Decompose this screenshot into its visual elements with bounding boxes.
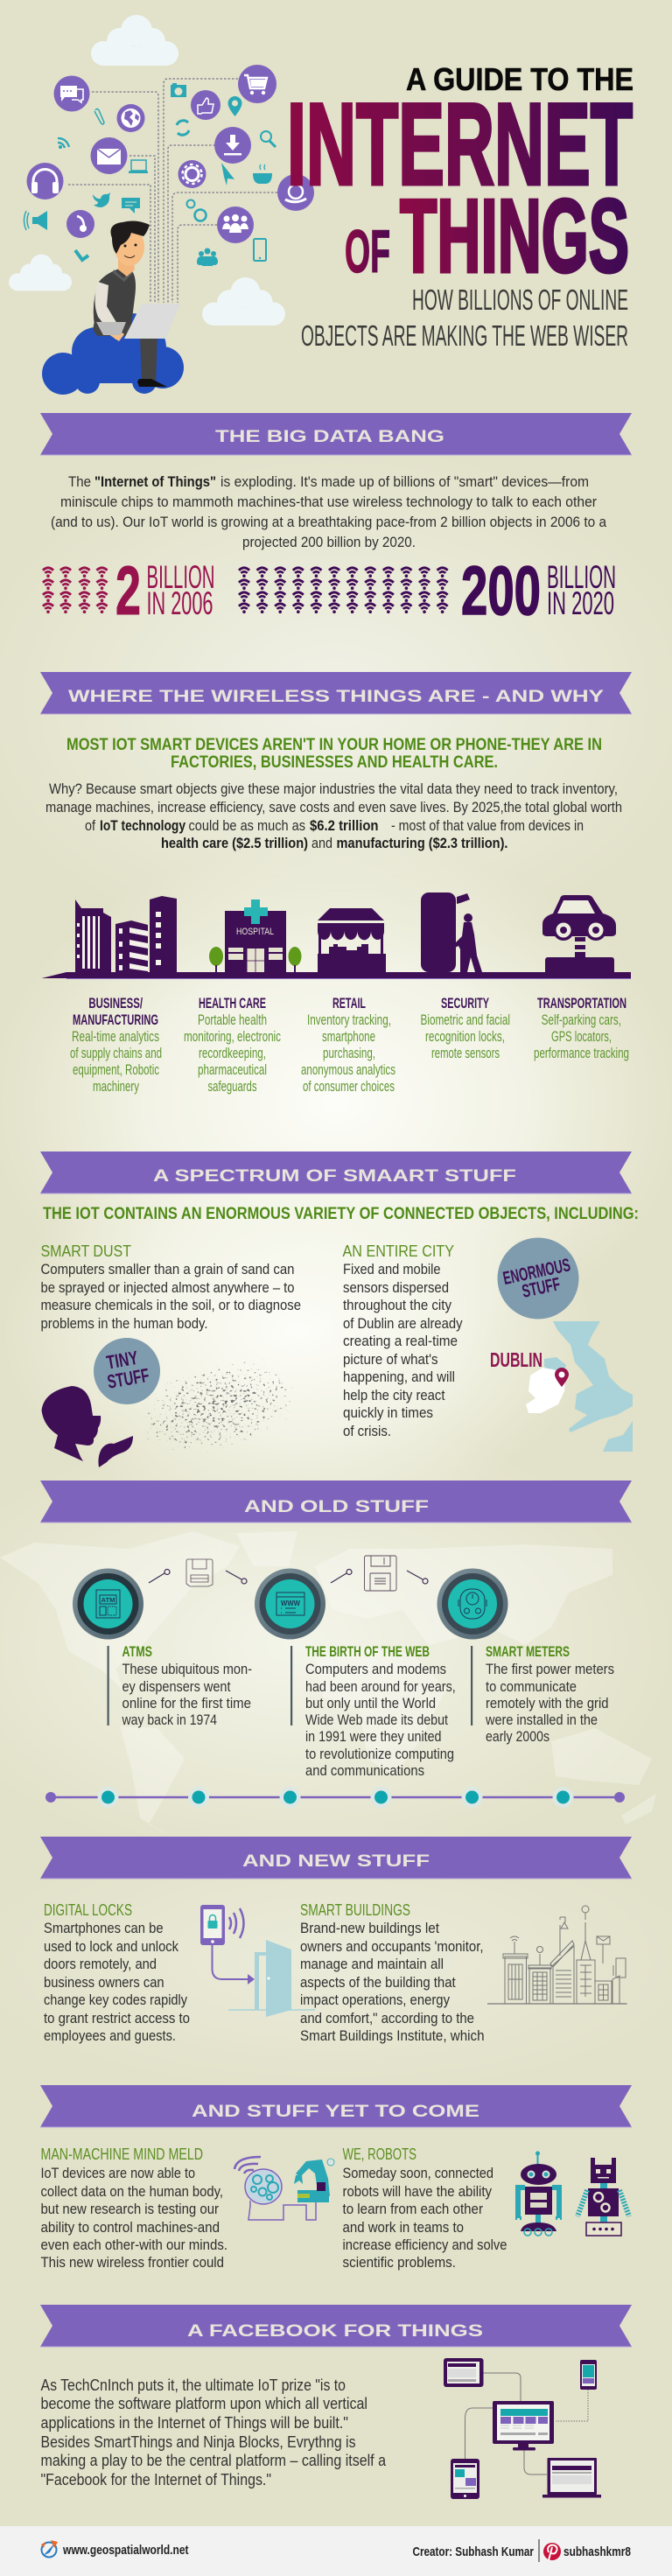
icon: music note bbox=[66, 210, 94, 238]
icon: floppy small bbox=[186, 1559, 213, 1586]
caption: transportation bbox=[534, 995, 629, 1061]
label: billion in 2006: BILLION bbox=[147, 559, 215, 595]
icon: phone bbox=[254, 239, 266, 261]
icon cluster: teal glyphs bbox=[24, 83, 276, 266]
text block: smart buildings: and comfort," according to the bbox=[300, 2010, 474, 2026]
device: laptop bbox=[542, 2458, 601, 2497]
label: billion in 2006 bbox=[147, 559, 215, 621]
caption: transportation: performance tracking bbox=[534, 1046, 629, 1061]
text block: why bbox=[46, 780, 622, 851]
green heading: most iot devices: FACTORIES, BUSINESSES AND HEALTH CARE. bbox=[171, 752, 498, 772]
text block: smart buildings: manage and maintain all bbox=[300, 1956, 444, 1972]
text block: smart buildings: aspects of the building that bbox=[300, 1974, 456, 1991]
website: www.geospatialworld.net bbox=[62, 2543, 189, 2558]
icon: wifi small bbox=[58, 138, 69, 149]
badge: enormous stuff bbox=[497, 1237, 579, 1320]
text block: we robots: increase efficiency and solve bbox=[343, 2236, 508, 2253]
icon: arrow corner bbox=[75, 250, 88, 260]
text block: why: - most of that value from devices in bbox=[391, 817, 584, 834]
text block: intro: (and to us). Our IoT world is growing at a breathtaking pace-from 2 billion objects in 2006 to a bbox=[51, 514, 606, 530]
text block: intro: "Internet of Things" bbox=[94, 473, 216, 490]
banner: where the wireless things are bbox=[40, 672, 632, 714]
text block: smart dust: Computers smaller than a grain of sand can bbox=[40, 1261, 294, 1278]
banner: and stuff yet to come: AND STUFF YET TO COME bbox=[192, 2102, 480, 2121]
text block: we robots bbox=[343, 2146, 508, 2271]
timeline bbox=[46, 1787, 625, 1808]
badge: enormous stuff: ENORMOUS bbox=[501, 1255, 572, 1289]
text block: birth of the web: and communications bbox=[305, 1762, 424, 1779]
buildings: business bbox=[75, 896, 177, 972]
connecting lines bbox=[466, 2373, 588, 2474]
caption: retail: of consumer choices bbox=[303, 1079, 395, 1095]
icon cluster: purple circles bbox=[26, 65, 314, 243]
label: billion in 2020 bbox=[547, 559, 616, 621]
building: retail bbox=[318, 908, 386, 972]
illustration: clouds behind header bbox=[9, 15, 285, 326]
caption: business: equipment, Robotic bbox=[73, 1062, 159, 1078]
text block: smart buildings: Brand-new buildings let bbox=[300, 1920, 439, 1936]
icon: paper plane bbox=[221, 163, 234, 186]
text block: facebook for things: become the software platform upon which all vertical bbox=[40, 2395, 368, 2412]
ground strip bbox=[42, 972, 631, 978]
text block: why: health care ($2.5 trillion) bbox=[161, 835, 308, 851]
background: world map bbox=[0, 1531, 656, 1836]
icon: gear bbox=[178, 160, 206, 188]
badge: enormous stuff: STUFF bbox=[520, 1274, 562, 1302]
device: monitor bbox=[493, 2401, 554, 2450]
man body bbox=[94, 221, 167, 387]
badge: tiny stuff: STUFF bbox=[106, 1364, 150, 1393]
text block: entire city: quickly in times bbox=[343, 1404, 433, 1421]
stat: 200 billion in 2020 bbox=[239, 551, 616, 629]
stat: 2 billion in 2006 bbox=[43, 551, 215, 629]
caption: security: Biometric and facial bbox=[420, 1012, 510, 1028]
text block: entire city: creating a real-time bbox=[343, 1333, 458, 1349]
caption: transportation: Self-parking cars, bbox=[542, 1012, 621, 1028]
text block: entire city: of Dublin are already bbox=[343, 1315, 463, 1332]
icon: gears bbox=[187, 200, 206, 220]
number: 200: 200 bbox=[461, 551, 541, 629]
text block: atms: online for the first time bbox=[122, 1695, 251, 1712]
text block: mind meld: This new wireless frontier could bbox=[40, 2254, 224, 2271]
icon: robot two bbox=[578, 2158, 629, 2236]
text block: digital locks: Smartphones can be bbox=[44, 1920, 164, 1936]
text block: digital locks: change key codes rapidly bbox=[44, 1992, 187, 2008]
logo: geospatial world bbox=[41, 2540, 58, 2557]
text block: digital locks: business owners can bbox=[44, 1974, 164, 1991]
icon: paperclip bbox=[94, 108, 104, 124]
text block: smart meters: to communicate bbox=[486, 1678, 577, 1695]
banner: and new stuff: AND NEW STUFF bbox=[242, 1852, 430, 1871]
text block: smart buildings: impact operations, energy bbox=[300, 1992, 450, 2008]
green heading: most iot devices bbox=[66, 735, 602, 772]
text block: facebook for things: "Facebook for the Internet of Things." bbox=[40, 2471, 271, 2488]
text block: why: and bbox=[312, 835, 332, 851]
caption: health care: Portable health bbox=[198, 1012, 267, 1028]
icon: sync arrows bbox=[177, 121, 189, 135]
banner: and stuff yet to come bbox=[40, 2085, 632, 2127]
caption: security: recognition locks, bbox=[425, 1029, 505, 1045]
caption: retail: Inventory tracking, bbox=[307, 1012, 391, 1028]
caption: business: machinery bbox=[93, 1079, 140, 1095]
text block: entire city: sensors dispersed bbox=[343, 1279, 449, 1296]
icon: smart city line art bbox=[487, 1906, 627, 2004]
text block: intro bbox=[51, 473, 606, 550]
text block: atms bbox=[107, 1643, 252, 1728]
text block: birth of the web: THE BIRTH OF THE WEB bbox=[305, 1643, 430, 1660]
label: dublin: DUBLIN bbox=[490, 1348, 542, 1371]
banner: a spectrum of smaart stuff bbox=[40, 1152, 632, 1194]
caption: transportation: GPS locators, bbox=[551, 1029, 612, 1045]
text block: we robots: robots will have the ability bbox=[343, 2183, 492, 2200]
icon: message bbox=[122, 198, 140, 214]
badge: web: WWW bbox=[281, 1600, 300, 1607]
text block: smart buildings bbox=[300, 1901, 485, 2044]
text block: entire city: happening, and will bbox=[343, 1368, 455, 1385]
text block: digital locks: DIGITAL LOCKS bbox=[44, 1901, 132, 1919]
text block: facebook for things: As TechCnInch puts it, the ultimate IoT prize "is to bbox=[40, 2376, 346, 2394]
device: phone bbox=[580, 2360, 597, 2390]
banner: the big data bang bbox=[40, 413, 632, 455]
text block: entire city: help the city react bbox=[343, 1387, 445, 1404]
text block: smart meters: remotely with the grid bbox=[486, 1695, 609, 1712]
text block: birth of the web: Wide Web made its debut bbox=[305, 1712, 448, 1728]
text block: mind meld bbox=[40, 2146, 228, 2271]
badge: atm: ATM bbox=[102, 1596, 116, 1604]
text block: digital locks: employees and guests. bbox=[44, 2027, 176, 2044]
caption: business: MANUFACTURING bbox=[73, 1012, 158, 1028]
banner: a facebook for things bbox=[40, 2305, 632, 2347]
text block: intro: projected 200 billion by 2020. bbox=[242, 534, 416, 550]
text block: entire city: Fixed and mobile bbox=[343, 1261, 441, 1278]
creator: Creator: Subhash Kumar bbox=[413, 2544, 534, 2559]
text block: intro: miniscule chips to mammoth machines-that use wireless technology to talk to each other bbox=[60, 494, 597, 510]
text block: mind meld: IoT devices are now able to bbox=[40, 2165, 195, 2181]
text block: birth of the web: in 1991 were they united bbox=[305, 1728, 441, 1745]
vehicle: car lift bbox=[542, 895, 616, 972]
caption: health care: safeguards bbox=[208, 1079, 257, 1095]
laptop bbox=[96, 304, 180, 339]
icon grid: wifi purple bbox=[239, 568, 448, 613]
text block: facebook for things: making a play to be the central platform – calling itself a bbox=[40, 2452, 387, 2469]
label: billion in 2020: BILLION bbox=[547, 559, 616, 595]
text block: smart dust: be sprayed or injected almost anywhere – to bbox=[40, 1279, 294, 1296]
text block: entire city: of crisis. bbox=[343, 1423, 391, 1439]
text block: birth of the web: but only until the World bbox=[305, 1695, 436, 1712]
text block: smart dust: measure chemicals in the soil, or to diagnose bbox=[40, 1297, 301, 1313]
illustration: head blowing dust bbox=[42, 1386, 133, 1467]
text block: we robots: to learn from each other bbox=[343, 2201, 483, 2217]
banner: and old stuff bbox=[40, 1480, 632, 1522]
badge: atm bbox=[73, 1568, 144, 1640]
icon: globe bbox=[117, 104, 145, 132]
text block: digital locks: doors remotely, and bbox=[44, 1956, 157, 1972]
icon: download bbox=[214, 127, 251, 164]
icon: robot one bbox=[516, 2151, 561, 2236]
icon: twitter bird bbox=[93, 192, 110, 207]
divider bbox=[539, 2539, 540, 2562]
icon: coffee cup bbox=[253, 164, 272, 184]
footer bbox=[0, 2526, 672, 2576]
timeline circles: old stuff bbox=[73, 1556, 508, 1640]
caption: transportation: TRANSPORTATION bbox=[537, 995, 626, 1012]
text block: smart meters: The first power meters bbox=[486, 1661, 614, 1677]
icon: people bbox=[217, 206, 254, 243]
caption: retail: purchasing, bbox=[323, 1046, 375, 1061]
caption: retail: smartphone bbox=[322, 1029, 375, 1045]
text block: atms: ATMS bbox=[122, 1643, 152, 1660]
caption: business: of supply chains and bbox=[70, 1046, 162, 1061]
icon: camera bbox=[171, 83, 186, 97]
northern ireland bbox=[544, 1357, 566, 1374]
text block: atms: ey dispensers went bbox=[122, 1678, 231, 1695]
badge: tiny stuff bbox=[94, 1338, 160, 1404]
icon: brain controlling robot arm bbox=[234, 2157, 334, 2220]
caption: health care: HEALTH CARE bbox=[199, 995, 266, 1012]
handle: subhashkmr8 bbox=[564, 2544, 631, 2559]
text block: facebook for things: applications in the Internet of Things will be built." bbox=[40, 2414, 348, 2432]
skyline illustration bbox=[42, 892, 631, 978]
icon: chat bbox=[54, 75, 89, 112]
banner: and old stuff: AND OLD STUFF bbox=[244, 1497, 429, 1516]
building: hospital: HOSPITAL bbox=[236, 927, 274, 937]
caption: security bbox=[420, 995, 510, 1061]
text block: smart dust: problems in the human body. bbox=[40, 1315, 208, 1332]
text block: we robots: WE, ROBOTS bbox=[343, 2146, 416, 2163]
building: hospital bbox=[209, 900, 301, 972]
france coast bbox=[603, 1421, 633, 1452]
text block: why: $6.2 trillion bbox=[310, 817, 378, 834]
text block: digital locks bbox=[44, 1901, 190, 2044]
banner: where the wireless things are: WHERE THE WIRELESS THINGS ARE - AND WHY bbox=[68, 687, 604, 706]
icon: group bbox=[197, 248, 218, 266]
icon: pinterest bbox=[543, 2543, 561, 2560]
text block: intro: is exploding. It's made up of billions of "smart" devices—from bbox=[220, 473, 589, 490]
banner: a facebook for things: A FACEBOOK FOR THINGS bbox=[187, 2321, 483, 2341]
text block: entire city bbox=[343, 1242, 463, 1439]
label: billion in 2006: IN 2006 bbox=[147, 585, 214, 621]
banner: a spectrum of smaart stuff: A SPECTRUM OF SMAART STUFF bbox=[153, 1166, 516, 1186]
text block: birth of the web: Computers and modems bbox=[305, 1661, 446, 1677]
caption: retail: RETAIL bbox=[332, 995, 366, 1012]
text block: atms: These ubiquitous mon- bbox=[122, 1661, 252, 1677]
caption: security: SECURITY bbox=[441, 995, 489, 1012]
icon: speaker bbox=[24, 211, 47, 230]
text block: birth of the web: had been around for years, bbox=[305, 1678, 456, 1695]
illustration: person on cloud with laptop bbox=[42, 221, 184, 395]
title bbox=[287, 61, 634, 294]
label: billion in 2020: IN 2020 bbox=[547, 585, 614, 621]
text block: we robots: scientific problems. bbox=[343, 2254, 456, 2271]
connector pins bbox=[149, 1570, 428, 1584]
text block: mind meld: ability to control machines-and bbox=[40, 2219, 220, 2236]
text block: smart meters bbox=[471, 1643, 614, 1745]
illustration: dotted connection lines bbox=[68, 79, 277, 303]
text block: smart buildings: SMART BUILDINGS bbox=[300, 1901, 410, 1919]
text block: birth of the web bbox=[290, 1643, 456, 1779]
caption: business bbox=[70, 995, 162, 1095]
building: security bbox=[421, 892, 482, 972]
text block: entire city: throughout the city bbox=[343, 1297, 452, 1313]
text block: digital locks: used to lock and unlock bbox=[44, 1938, 178, 1955]
icon: cart bbox=[238, 65, 276, 103]
subtitle bbox=[301, 284, 628, 352]
text block: we robots: and work in teams to bbox=[343, 2219, 464, 2236]
icon: map pin bbox=[228, 96, 242, 116]
icon: magnifier bbox=[261, 131, 276, 147]
title line: a guide to the: A GUIDE TO THE bbox=[406, 61, 634, 97]
text block: digital locks: to grant restrict access to bbox=[44, 2010, 190, 2026]
caption: business: BUSINESS/ bbox=[88, 995, 143, 1012]
text block: mind meld: but new research is testing our bbox=[40, 2201, 219, 2217]
banner: and new stuff bbox=[40, 1837, 632, 1879]
banner: the big data bang: THE BIG DATA BANG bbox=[215, 427, 444, 446]
text block: atms: way back in 1974 bbox=[122, 1712, 217, 1728]
great britain bbox=[553, 1321, 633, 1432]
icon: headphones bbox=[26, 163, 63, 200]
text block: smart buildings: Smart Buildings Institute, which bbox=[300, 2027, 485, 2044]
badge: web bbox=[255, 1568, 326, 1640]
text block: why: of bbox=[85, 817, 95, 834]
illustration: dust cloud bbox=[106, 1329, 332, 1485]
icon: mail bbox=[91, 137, 128, 174]
text block: smart dust bbox=[40, 1242, 301, 1332]
text block: facebook for things bbox=[40, 2376, 387, 2488]
text block: intro: The bbox=[68, 473, 91, 490]
text block: birth of the web: to revolutionize computing bbox=[305, 1746, 454, 1762]
text block: smart dust: SMART DUST bbox=[40, 1242, 131, 1260]
caption: retail bbox=[301, 995, 396, 1095]
caption: health care: recordkeeping, bbox=[199, 1046, 266, 1061]
icon: phone unlocking door bbox=[200, 1905, 315, 2017]
device network bbox=[444, 2358, 601, 2499]
device: tablet landscape bbox=[444, 2358, 483, 2387]
icon: at sign bbox=[277, 174, 314, 211]
icon: laptop small bbox=[129, 160, 148, 173]
cloud seat bbox=[42, 313, 184, 395]
icon: thumb bbox=[191, 90, 220, 120]
caption: health care: pharmaceutical bbox=[198, 1062, 267, 1078]
map: uk and ireland bbox=[490, 1321, 633, 1452]
text block: why: IoT technology bbox=[100, 817, 186, 834]
icon: floppy large bbox=[364, 1556, 396, 1591]
text block: smart buildings: owners and occupants 'monitor, bbox=[300, 1938, 483, 1955]
text block: entire city: picture of what's bbox=[343, 1351, 438, 1368]
text block: smart meters: SMART METERS bbox=[486, 1643, 570, 1660]
text block: mind meld: MAN-MACHINE MIND MELD bbox=[40, 2146, 203, 2163]
icon grid: wifi maroon bbox=[43, 568, 107, 613]
text block: why: manufacturing ($2.3 trillion). bbox=[336, 835, 508, 851]
device: tablet portrait bbox=[451, 2459, 480, 2499]
text block: facebook for things: Besides SmartThings and Ninja Blocks, Evrythng is bbox=[40, 2433, 355, 2451]
ireland bbox=[526, 1368, 566, 1413]
title line: of: OF bbox=[345, 218, 390, 285]
caption: health care: monitoring, electronic bbox=[184, 1029, 281, 1045]
caption: health care bbox=[184, 995, 281, 1095]
map pin bbox=[555, 1368, 569, 1387]
badge: tiny stuff: TINY bbox=[105, 1347, 140, 1374]
caption: security: remote sensors bbox=[431, 1046, 500, 1061]
captions: industries bbox=[70, 995, 629, 1095]
text block: we robots: Someday soon, connected bbox=[343, 2165, 494, 2181]
number: 2: 2 bbox=[116, 551, 141, 629]
text block: why: could be as much as bbox=[189, 817, 305, 834]
text block: mind meld: even each other-with our minds. bbox=[40, 2236, 228, 2253]
caption: retail: anonymous analytics bbox=[301, 1062, 396, 1078]
text block: entire city: AN ENTIRE CITY bbox=[343, 1242, 454, 1260]
badge: meter bbox=[438, 1568, 508, 1640]
caption: business: Real-time analytics bbox=[72, 1029, 159, 1045]
text block: smart meters: early 2000s bbox=[486, 1728, 550, 1745]
text block: smart meters: were installed in the bbox=[485, 1712, 598, 1728]
text block: mind meld: collect data on the human body, bbox=[40, 2183, 223, 2200]
